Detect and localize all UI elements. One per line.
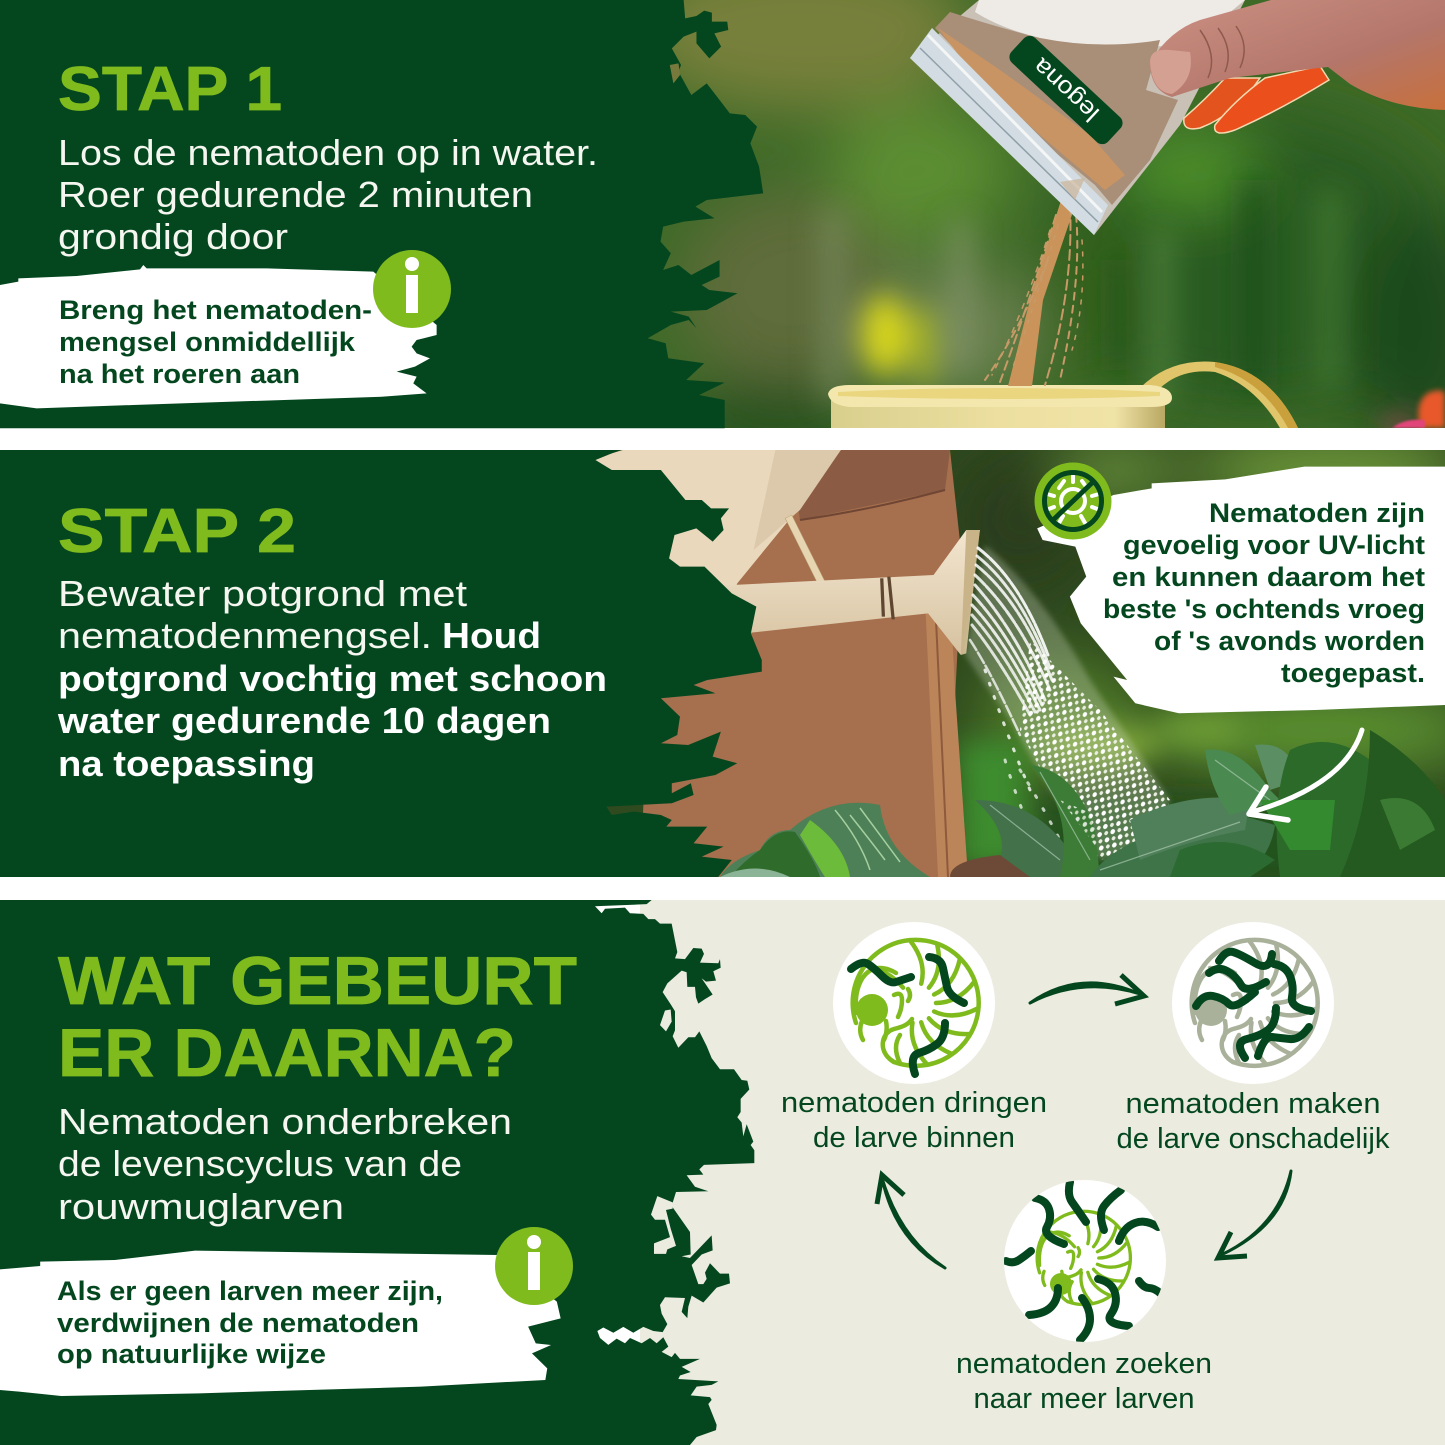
callout: UV-licht: of 's avonds worden	[1154, 626, 1425, 656]
callout: tip stap 1	[0, 250, 451, 408]
body text: rouwmuglarven	[58, 1186, 344, 1227]
label: nematoden maken	[1126, 1088, 1380, 1120]
callout: UV-licht: beste 's ochtends vroeg	[1103, 594, 1425, 624]
photo: bag with legona label	[910, 0, 1245, 235]
body text: Houd	[442, 615, 541, 656]
heading	[58, 943, 577, 1091]
panel: stap 2	[0, 440, 1445, 880]
panel: stap 1	[0, 0, 1445, 460]
logo label: legona	[1027, 52, 1105, 127]
body text: grondig door	[58, 216, 288, 257]
body text: Nematoden onderbreken	[58, 1101, 512, 1142]
photo: garden and watering	[590, 440, 1445, 880]
icon: info	[495, 1227, 573, 1305]
callout: tip daarna: op natuurlijke wijze	[57, 1339, 326, 1369]
callout: tip stap 1: na het roeren aan	[59, 359, 300, 389]
heading: ER DAARNA?	[58, 1015, 516, 1091]
callout: UV-licht: toegepast.	[1281, 658, 1425, 688]
callout: UV-licht: Nematoden zijn	[1209, 498, 1425, 528]
callout: UV-licht: en kunnen daarom het	[1112, 562, 1425, 592]
photo: hand	[1150, 0, 1445, 133]
panel: wat gebeurt er daarna	[0, 900, 1445, 1445]
photo: garden background	[630, 0, 1445, 460]
body text: de levenscyclus van de	[58, 1143, 462, 1184]
callout: tip daarna: Als er geen larven meer zijn,	[57, 1276, 443, 1306]
photo: dress	[640, 450, 968, 877]
body text	[57, 573, 607, 784]
icon: nematoden zoeken	[1004, 1180, 1166, 1342]
icon: nematoden dringen binnen	[833, 922, 995, 1084]
body text	[58, 132, 598, 257]
icon: no sun	[1034, 462, 1112, 540]
body text: nematodenmengsel.	[58, 615, 432, 656]
callout: tip stap 1: Breng het nematoden-	[59, 295, 372, 325]
label: nematoden dringen	[781, 1087, 1047, 1119]
photo: powder stream	[985, 197, 1083, 386]
heading: STAP 1	[58, 55, 282, 124]
callout: UV-licht	[1034, 462, 1445, 820]
label: nematoden zoeken	[956, 1348, 1212, 1380]
body text: water gedurende 10 dagen	[57, 700, 551, 741]
icon: nematoden maken onschadelijk	[1172, 922, 1334, 1084]
heading: WAT GEBEURT	[58, 943, 577, 1019]
photo: plants	[720, 730, 1445, 877]
body text: Roer gedurende 2 minuten	[58, 174, 533, 215]
body text: na toepassing	[58, 743, 315, 784]
arrow: naar rechts	[1030, 975, 1144, 1004]
photo: water stream	[965, 545, 1170, 860]
body text	[58, 1101, 512, 1227]
body text: potgrond vochtig met schoon	[58, 658, 607, 699]
body text: Los de nematoden op in water.	[58, 132, 598, 173]
background: beige	[640, 900, 1445, 1445]
icon: info	[373, 250, 451, 328]
label: naar meer larven	[974, 1383, 1194, 1415]
logo label	[1006, 33, 1126, 147]
arrow: naar beneden	[1218, 1171, 1291, 1258]
arrow: naar boven	[877, 1175, 945, 1268]
label: de larve onschadelijk	[1116, 1123, 1390, 1155]
brush edge: dark panel 3	[0, 900, 754, 1445]
label: de larve binnen	[813, 1122, 1015, 1154]
brush edge: dark panel 1	[0, 0, 763, 428]
heading: STAP 2	[58, 497, 296, 566]
photo: watering can body	[590, 450, 980, 655]
callout: tip daarna: verdwijnen de nematoden	[57, 1308, 419, 1338]
brush edge: dark panel 2	[0, 450, 762, 877]
arrow: white to plant	[1249, 730, 1362, 820]
photo: watering can	[828, 362, 1298, 428]
callout: tip stap 1: mengsel onmiddellijk	[59, 327, 356, 357]
callout: UV-licht: gevoelig voor UV-licht	[1123, 530, 1425, 560]
body text: Bewater potgrond met	[58, 573, 467, 614]
callout: tip daarna	[0, 1227, 573, 1396]
